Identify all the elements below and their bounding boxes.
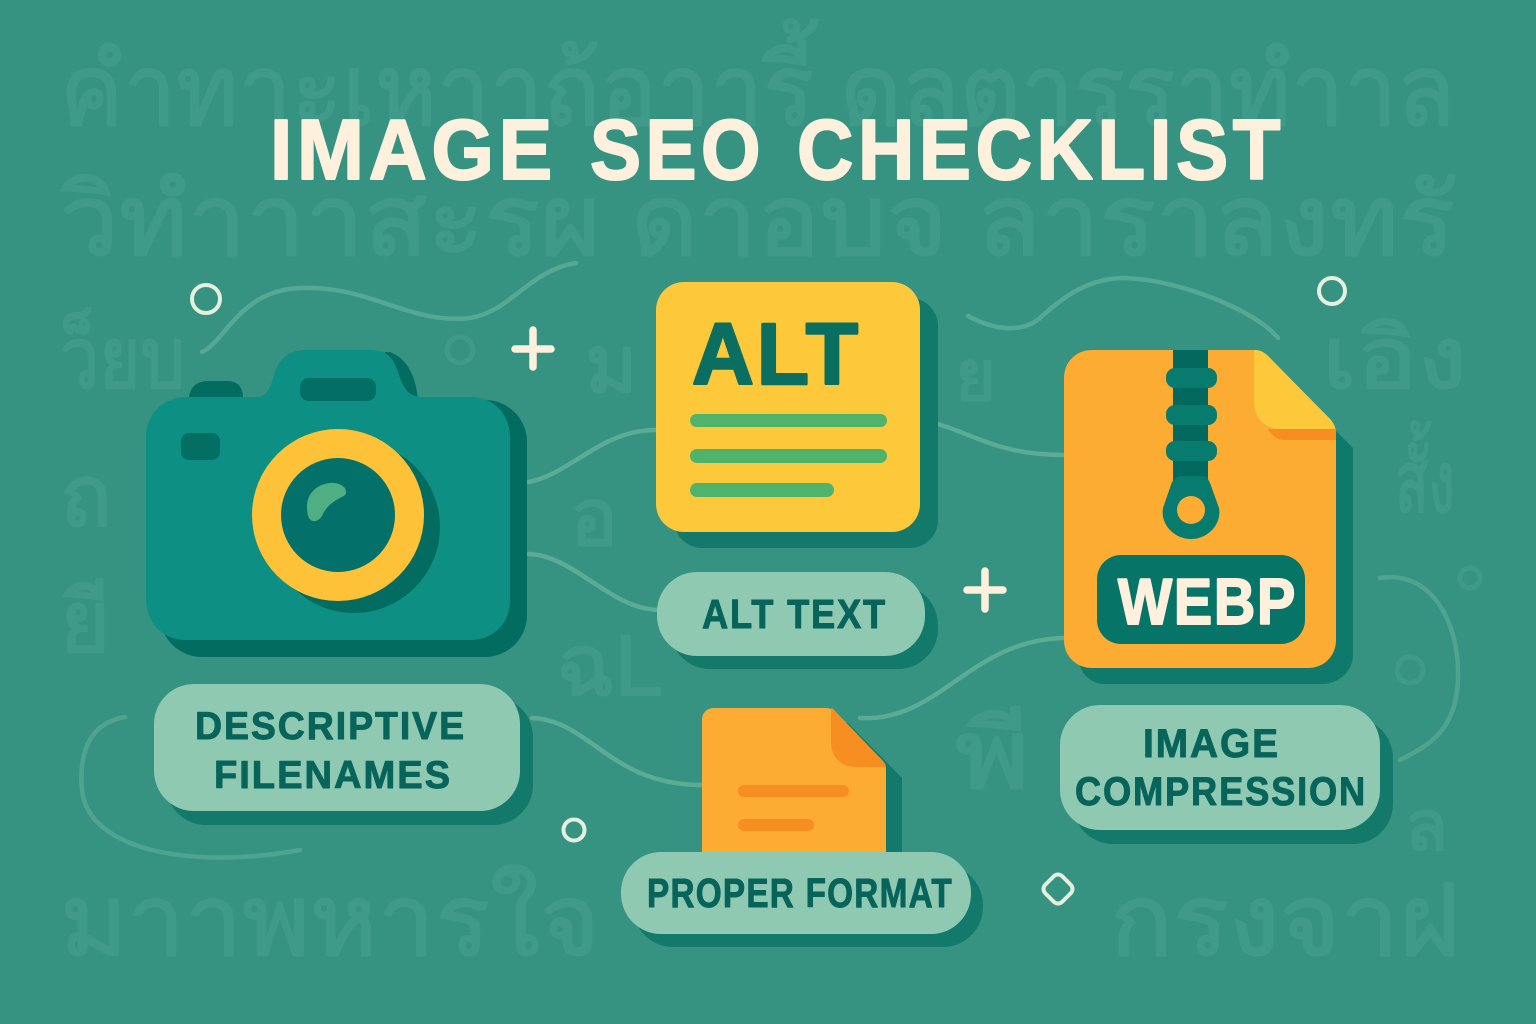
icon: camera bbox=[146, 350, 527, 657]
faint background script: ยี bbox=[60, 575, 110, 671]
alt heading: ALT bbox=[692, 306, 861, 403]
faint background script: ถ bbox=[60, 449, 112, 545]
label: image compression bbox=[1060, 705, 1393, 844]
icon: webp zip file: WEBP bbox=[1118, 565, 1297, 638]
faint background script: เอิง bbox=[1322, 311, 1467, 407]
label: proper format: PROPER FORMAT bbox=[647, 870, 953, 916]
label: image compression: COMPRESSION bbox=[1075, 770, 1367, 814]
faint background script: อ bbox=[570, 473, 618, 562]
icon: small document bbox=[702, 708, 902, 870]
title: CHECKLIST bbox=[797, 103, 1285, 198]
alt text lines bbox=[690, 414, 887, 497]
faint background script: วิทำาาสะรผ ดาอบจ ลาราลงทรั bbox=[60, 165, 1455, 277]
faint background script: มาาพหารใจ bbox=[60, 865, 600, 977]
faint background script: คำทาะเหาาถ้อาารี้ ดลตารราทำาล bbox=[60, 19, 1455, 147]
label: alt text bbox=[657, 572, 938, 669]
plus icon right bbox=[967, 571, 1003, 609]
title: SEO bbox=[590, 103, 765, 198]
faint background script: ย bbox=[955, 337, 996, 415]
faint background script: สั้ง bbox=[1395, 421, 1455, 531]
faint background script: พี bbox=[955, 702, 1030, 809]
label: descriptive filenames bbox=[154, 684, 533, 825]
icon: webp zip file bbox=[1064, 350, 1353, 684]
label: alt text: ALT TEXT bbox=[702, 591, 887, 637]
label: image compression: IMAGE bbox=[1143, 722, 1280, 766]
faint background script: ฉL bbox=[556, 618, 662, 714]
connector curves bbox=[81, 263, 1458, 858]
decorative ring bottom bbox=[564, 820, 584, 840]
plus icon left bbox=[515, 330, 551, 367]
faint background script: ล bbox=[1405, 787, 1448, 865]
label: descriptive filenames: FILENAMES bbox=[214, 754, 452, 797]
faint decorative circles bbox=[447, 337, 1480, 683]
label: proper format bbox=[621, 852, 983, 947]
label: descriptive filenames: DESCRIPTIVE bbox=[195, 705, 466, 748]
faint background script: กรงจาฝ bbox=[1110, 865, 1460, 977]
title bbox=[270, 103, 1285, 198]
faint background script: ว็ยบ bbox=[60, 308, 185, 407]
decorative ring top left bbox=[192, 285, 220, 313]
decorative diamond bbox=[1041, 872, 1075, 906]
title: IMAGE bbox=[270, 103, 557, 198]
icon: alt text card bbox=[656, 282, 938, 548]
decorative ring top right bbox=[1319, 278, 1345, 304]
faint background script: ม bbox=[585, 320, 638, 409]
